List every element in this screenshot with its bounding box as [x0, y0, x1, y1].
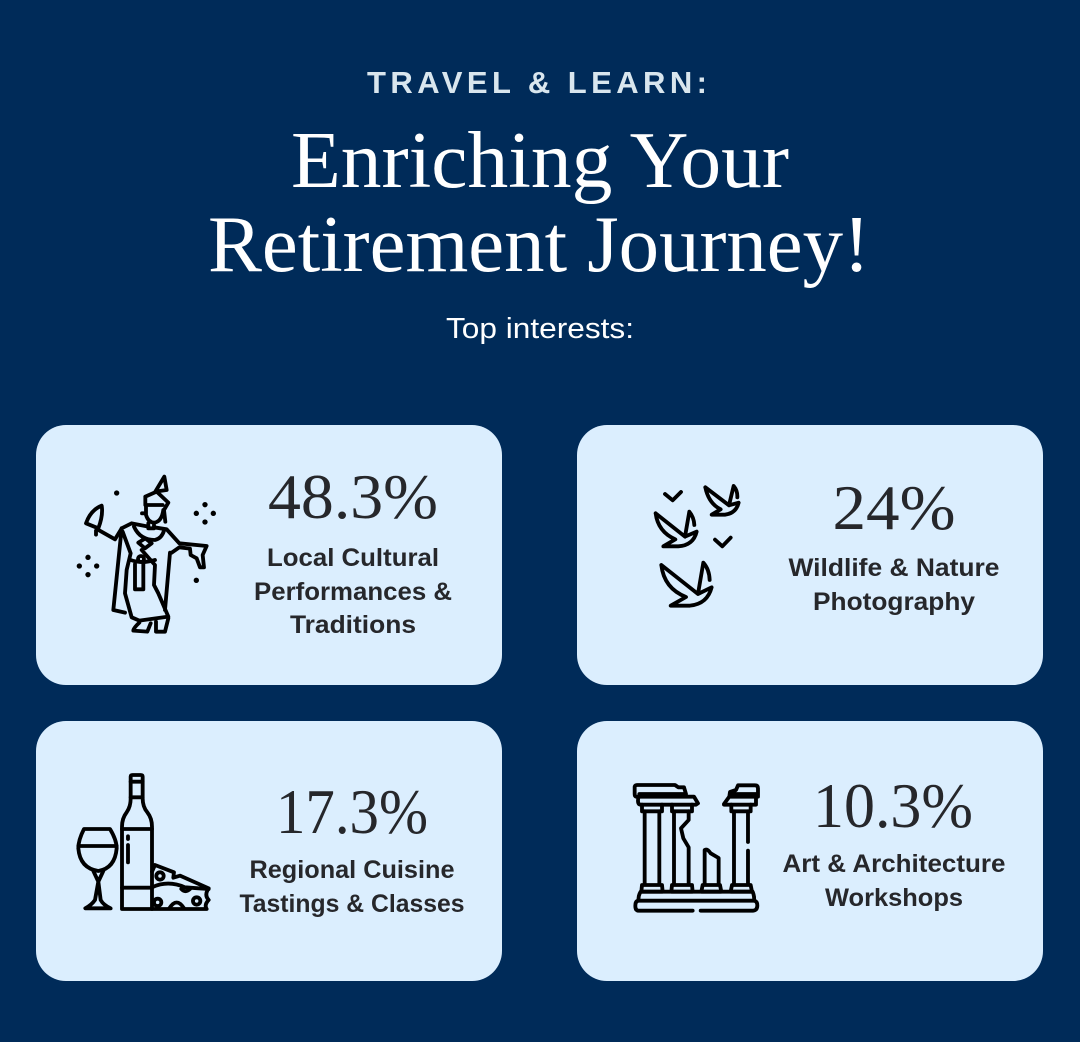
- icon: ruins: [635, 785, 758, 911]
- label: art and architecture: Art & Architecture: [782, 850, 1006, 878]
- label: art and architecture: [782, 850, 1006, 912]
- title: Enriching Your: [291, 117, 789, 205]
- label: wildlife and nature: Photography: [813, 588, 975, 616]
- panel: regional cuisine: [36, 721, 502, 981]
- label: wildlife and nature: [788, 554, 1000, 616]
- label: local cultural performances: [254, 544, 452, 639]
- label: regional cuisine: Regional Cuisine: [250, 856, 455, 884]
- percentage: 48.3%: 48.3%: [268, 461, 438, 532]
- label: regional cuisine: Tastings & Classes: [240, 890, 464, 918]
- eyebrow heading: TRAVEL & LEARN:: [367, 65, 707, 100]
- percentage: 24%: 24%: [832, 472, 956, 543]
- title: [208, 117, 870, 289]
- percentage: 17.3%: 17.3%: [276, 776, 428, 847]
- subtitle: Top interests:: [446, 313, 634, 345]
- label: wildlife and nature: Wildlife & Nature: [788, 554, 1000, 582]
- title: Retirement Journey!: [208, 201, 870, 289]
- label: regional cuisine: [240, 856, 464, 918]
- label: local cultural performances: Traditions: [290, 611, 416, 639]
- panel: wildlife and nature: [577, 425, 1043, 685]
- label: art and architecture: Workshops: [825, 884, 963, 912]
- icon: dancer: [77, 477, 216, 632]
- label: local cultural performances: Local Cultural: [267, 544, 439, 572]
- icon: birds: [656, 486, 739, 606]
- panel: local cultural performances: [36, 425, 502, 685]
- label: local cultural performances: Performances &: [254, 578, 452, 606]
- percentage: 10.3%: 10.3%: [813, 770, 973, 841]
- panel: art and architecture: [577, 721, 1043, 981]
- icon: wine and cheese: [78, 775, 209, 909]
